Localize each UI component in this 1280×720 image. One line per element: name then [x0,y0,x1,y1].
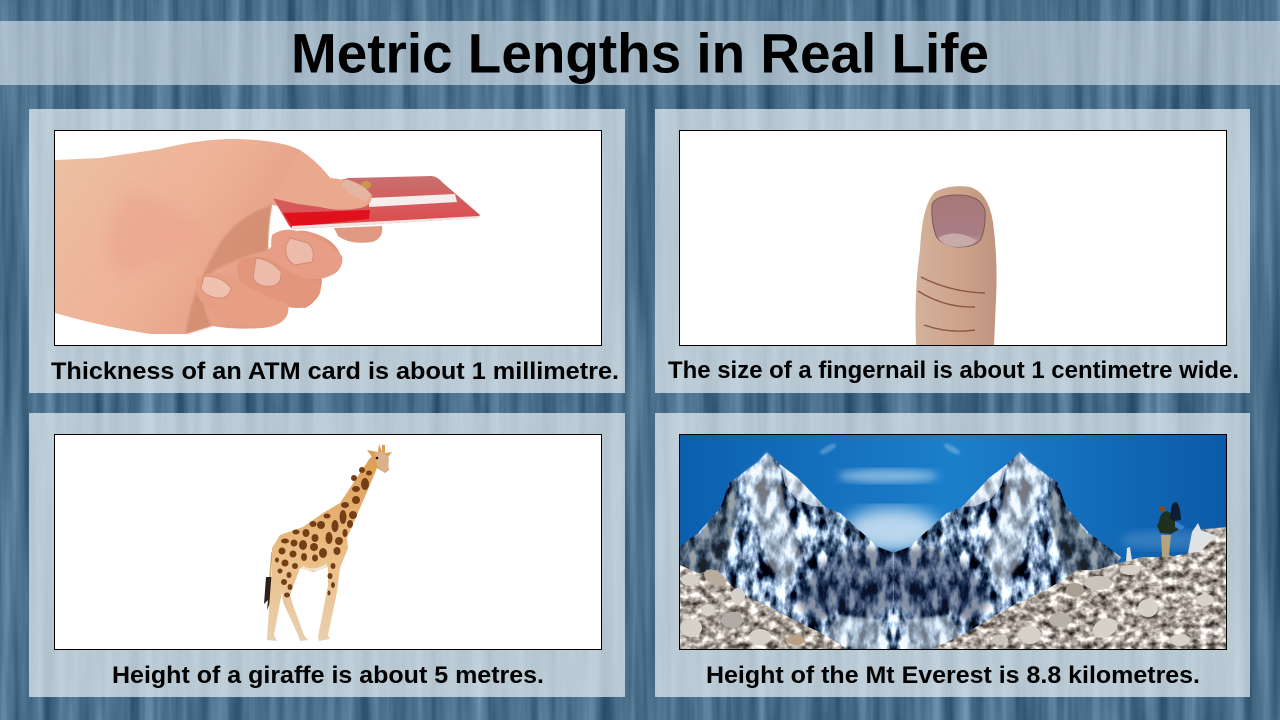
right mountain [893,452,1121,650]
thumb over card [272,150,372,210]
giraffe tail [270,552,272,577]
caption: ATM card: Thickness of an ATM card is about 1 millimetre. [51,358,619,385]
clouds [819,442,1220,552]
title: Metric Lengths in Real Life [291,22,989,84]
image: hand holding card [54,130,602,346]
panel: giraffe [29,413,625,697]
thumb [916,186,997,345]
panel: fingernail [655,109,1250,393]
fingernails [286,238,313,265]
giraffe spots [275,467,372,598]
giraffe body [267,444,392,641]
left mountain (mirror) [666,452,894,650]
fingernail [932,195,985,247]
caption: fingernail: The size of a fingernail is about 1 centimetre wide. [668,357,1239,384]
sky [680,435,1226,564]
panel: Mt Everest [655,413,1250,697]
image: Mt Everest [666,434,1226,650]
panel: ATM card [29,109,625,393]
caption: Mt Everest: Height of the Mt Everest is 8.8 kilometres. [706,662,1200,689]
hiker [1157,502,1185,557]
finger behind card [334,226,382,243]
title band [0,21,1280,85]
fingers [271,230,342,279]
image: giraffe [54,434,602,650]
hand palm [55,139,372,334]
giraffe belly and head [301,563,327,571]
left rocks [680,565,849,650]
thumb creases [918,277,985,331]
right rocks [930,523,1226,650]
card [273,176,480,229]
image: thumb with fingernail [680,130,1226,346]
palm shadow [186,205,272,334]
caption: giraffe: Height of a giraffe is about 5 metres. [112,662,544,689]
